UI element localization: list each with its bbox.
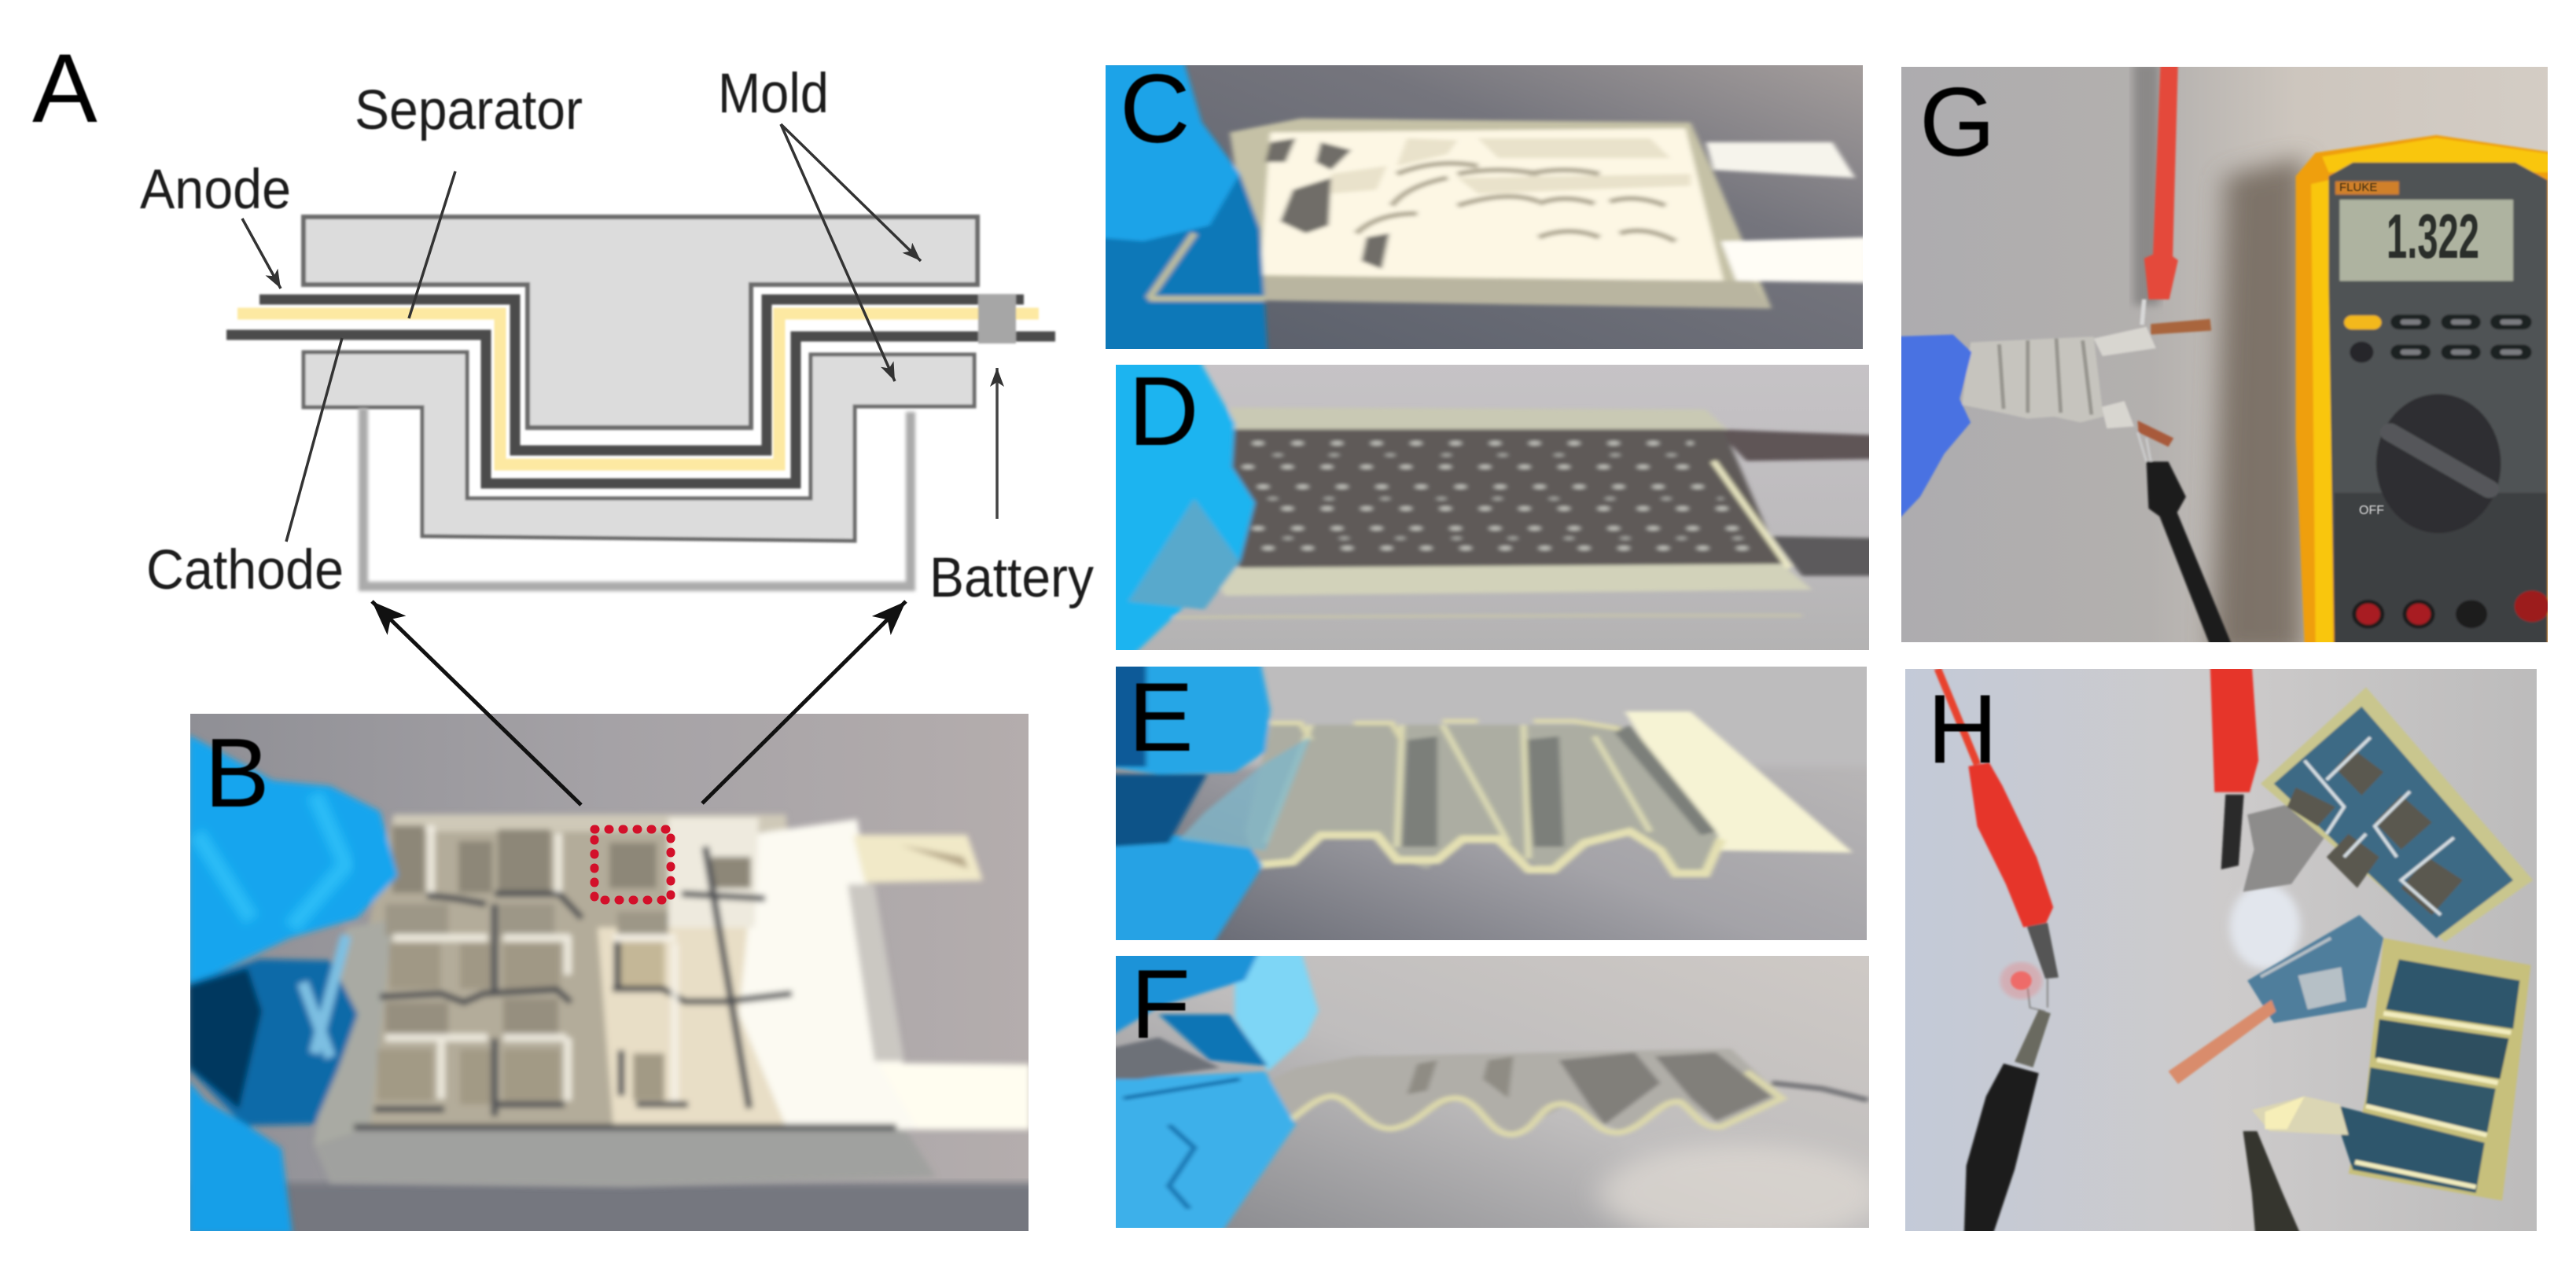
lower dark tab: [1772, 536, 1878, 576]
glove bright upper: [189, 735, 398, 987]
white highlights: [385, 825, 676, 1100]
meter yellow rim: [2311, 138, 2555, 645]
upper dark tab: [1716, 429, 1878, 461]
probe shadow: [2133, 63, 2159, 305]
silver battery body: [363, 821, 668, 1127]
glove top shadow: [1108, 660, 1146, 766]
panel: D photo of dark side of battery: [1108, 358, 1878, 657]
light ridges: [1265, 725, 1650, 858]
meter lower face: [2335, 493, 2548, 645]
heading letter E: E: [1128, 663, 1194, 772]
panel: A layered mold diagram: [32, 35, 1094, 609]
heading letter G: G: [1919, 68, 1995, 177]
tab dark sliver: [900, 845, 969, 869]
right clip jaws: [2221, 795, 2244, 869]
lighter dark facets: [1407, 1056, 1514, 1098]
battery 2 strip 4: [2331, 1104, 2485, 1193]
brand plate: [2335, 182, 2399, 195]
cream separators: [2355, 1013, 2511, 1187]
bright foil reflection: [2265, 1097, 2305, 1130]
red jack middle: [2405, 601, 2433, 626]
battery 1 interior: [2274, 707, 2513, 938]
upper probe tip: [2142, 299, 2144, 325]
pale film streaks over glove: [303, 935, 346, 1057]
dark creases: [354, 894, 896, 1127]
top right tab: [853, 835, 983, 883]
arrow: battery pointer: [995, 368, 999, 519]
dark glove fold: [189, 968, 262, 1109]
power button: [2350, 342, 2373, 362]
lower film band: [1209, 564, 1812, 596]
dial: [2376, 394, 2501, 533]
label Battery: Battery: [929, 547, 1094, 609]
mottled shadows on the surface: [1331, 138, 1691, 193]
film edge strip right: [848, 884, 904, 1061]
cell faces row 2: [385, 904, 668, 935]
shadow left of the meter: [2212, 156, 2305, 657]
grey gap under fingers: [1108, 1038, 1220, 1079]
glove folds: [1124, 1079, 1240, 1209]
arrow: mold pointer to top mold: [781, 124, 921, 261]
battery 1 tab: [2243, 799, 2324, 891]
battery 1 cells: [2287, 749, 2463, 915]
bright right edge: [1713, 461, 1790, 568]
corrugated body: [1245, 725, 1718, 877]
glove cyan highlights: [197, 794, 346, 928]
glove lower: [1108, 836, 1263, 950]
film edge over glove: [1149, 233, 1265, 299]
LED: [2011, 972, 2032, 990]
wave highlights: [1356, 164, 1676, 241]
battery 2 strip 2: [2375, 1020, 2509, 1079]
battery 1 white creases: [2305, 737, 2454, 915]
glove top: [1108, 660, 1270, 774]
glove middle shadow: [1108, 774, 1207, 847]
label Separator: Separator: [355, 79, 583, 141]
glove lower: [1108, 1071, 1296, 1236]
meter brand label: FLUKE: [2339, 181, 2377, 194]
meter orange case: [2296, 135, 2555, 645]
black probe: [2147, 461, 2232, 645]
battery tabs: [2094, 327, 2156, 428]
lower tab: [1721, 237, 1868, 283]
meter dark face: [2328, 163, 2548, 645]
wave rim: [1238, 1071, 1782, 1134]
silver highlight on tab: [2261, 938, 2344, 1008]
cell faces row 3: [389, 943, 560, 989]
dial off label: OFF: [2359, 504, 2384, 517]
grey background: [190, 714, 1029, 1231]
diagram drawing: [226, 217, 1055, 541]
upper film band: [1230, 407, 1731, 433]
darker floor at bottom: [190, 1179, 1029, 1231]
heading letter D: D: [1128, 358, 1199, 466]
cell faces row 5: [377, 1049, 664, 1104]
red probe: [2144, 63, 2178, 299]
background: [1108, 660, 1878, 950]
film frame: [1149, 119, 1772, 309]
cathode layer: [226, 335, 1055, 483]
label Cathode: Cathode: [146, 539, 344, 601]
warm bright cells on the right half: [594, 924, 786, 1128]
separator layer: [237, 314, 1039, 465]
arrow: from B cell to A frame right: [702, 601, 906, 803]
line: cathode pointer: [286, 338, 342, 542]
background: [1896, 63, 2563, 649]
cell faces row 4: [385, 998, 558, 1038]
LCD screen: [2339, 200, 2513, 281]
battery body: [1238, 1049, 1782, 1134]
panel: C photo of bright battery: [1093, 55, 1883, 360]
wire: [1772, 1083, 1868, 1100]
lower film edge: [1149, 277, 1772, 309]
black clip left: [1964, 1064, 2039, 1236]
anode layer: [259, 299, 1024, 450]
glove bright part: [1093, 63, 1240, 241]
arrow: anode pointer: [242, 219, 281, 288]
cell faces row 1: [392, 825, 751, 893]
heading letter H: H: [1927, 675, 1998, 784]
panel: H photo of batteries lighting an LED: [1901, 664, 2546, 1236]
heading letter A: A: [32, 35, 98, 143]
black jack: [2456, 600, 2487, 628]
arrow: from B cell to A frame left: [372, 601, 581, 805]
dark background: [1093, 55, 1883, 360]
battery 2 strip 3: [2366, 1067, 2496, 1135]
copper wire: [2169, 1000, 2276, 1084]
LED glow: [2000, 962, 2042, 999]
dark battery surface: [1220, 429, 1782, 568]
cream right tab: [1625, 711, 1853, 852]
black clip lower right: [2243, 1131, 2301, 1236]
glove upper pale: [1235, 950, 1319, 1071]
battery 2 frame: [2349, 938, 2530, 1200]
battery stripes: [1999, 339, 2092, 415]
upper tab: [1706, 142, 1855, 178]
bottom right tab: [878, 1063, 1030, 1130]
glove bottom: [189, 1081, 293, 1234]
bright lower right: [1599, 1144, 1883, 1243]
panel: F photo of sinusoidal corrugated battery: [1108, 950, 1883, 1243]
dark reflections: [1265, 138, 1389, 269]
highlight reflected beside battery: [2230, 884, 2300, 969]
lower probe tip: [2137, 432, 2151, 461]
outer film line: [1139, 615, 1802, 617]
glove dark wedge: [1159, 1014, 1268, 1066]
soft buttons: [2399, 322, 2523, 352]
light background: [1108, 360, 1878, 657]
small corrugated battery: [1962, 336, 2103, 423]
background: [1108, 950, 1878, 1236]
dark vertical gaps: [495, 847, 749, 1116]
upper copper wire: [2151, 319, 2211, 335]
overexposed right side: [739, 819, 920, 1130]
red plug: [2515, 590, 2550, 622]
black clip tip: [2015, 1009, 2051, 1067]
heading letter C: C: [1120, 55, 1190, 164]
yellow button: [2344, 315, 2382, 329]
film left strip: [314, 920, 393, 1145]
blue glove: [1896, 335, 1971, 522]
button highlights: [2403, 322, 2519, 352]
red clip left: [1968, 762, 2053, 928]
overexposed battery surface: [1260, 128, 1724, 281]
battery 2 strip 1: [2386, 959, 2520, 1029]
panel: E photo of trapezoid corrugated battery: [1093, 652, 1904, 950]
battery terminal block: [978, 294, 1016, 344]
red wire: [1938, 669, 1978, 764]
foil tab lower: [2252, 1097, 2349, 1135]
glove: [1093, 63, 1268, 356]
connecting tab: [2247, 915, 2383, 1023]
label Mold: Mold: [718, 63, 829, 125]
bottom mold: [304, 352, 974, 541]
dark facets: [1559, 1053, 1772, 1125]
line: separator pointer: [409, 171, 455, 318]
glove: [1108, 360, 1255, 657]
arrow: mold pointer to bottom mold: [781, 124, 895, 381]
label Anode: Anode: [140, 159, 291, 221]
red jack left: [2354, 601, 2383, 626]
glove lower shaded: [189, 959, 358, 1126]
top light background: [1093, 652, 1904, 766]
wave rim: [1250, 832, 1721, 873]
grey frame holding the battery unit: [363, 408, 911, 586]
heading letter F: F: [1131, 950, 1190, 1059]
top mold: [304, 217, 977, 428]
LED wires: [2028, 979, 2048, 1012]
glove upper dark: [1108, 950, 1260, 1038]
bright dimples: [1245, 443, 1761, 548]
red dotted selection box: [594, 829, 671, 900]
white area next to the red box: [668, 818, 759, 928]
glove lower film: [1128, 498, 1240, 609]
panel: G photo of multimeter measuring voltage: [1896, 63, 2563, 657]
top bright rim of body: [393, 814, 786, 832]
lower copper wire: [2137, 421, 2173, 446]
background: [1901, 664, 2546, 1236]
darker facets: [1402, 725, 1716, 847]
battery 1 frame: [2261, 687, 2533, 942]
heading letter B: B: [204, 719, 270, 828]
translucent film lower band: [314, 1127, 936, 1187]
dial pointer: [2390, 432, 2489, 489]
tan cell row 3 right: [617, 942, 664, 987]
left clip jaws: [2027, 923, 2059, 979]
upper wave rim: [1270, 721, 1620, 740]
red clip right: [2210, 664, 2258, 792]
panel: B photo of the battery with square cells: [190, 714, 1029, 1231]
clear film over glove: [1179, 737, 1311, 851]
more scattered dimples: [1270, 455, 1757, 538]
meter reading: 1.322: [2386, 201, 2479, 271]
